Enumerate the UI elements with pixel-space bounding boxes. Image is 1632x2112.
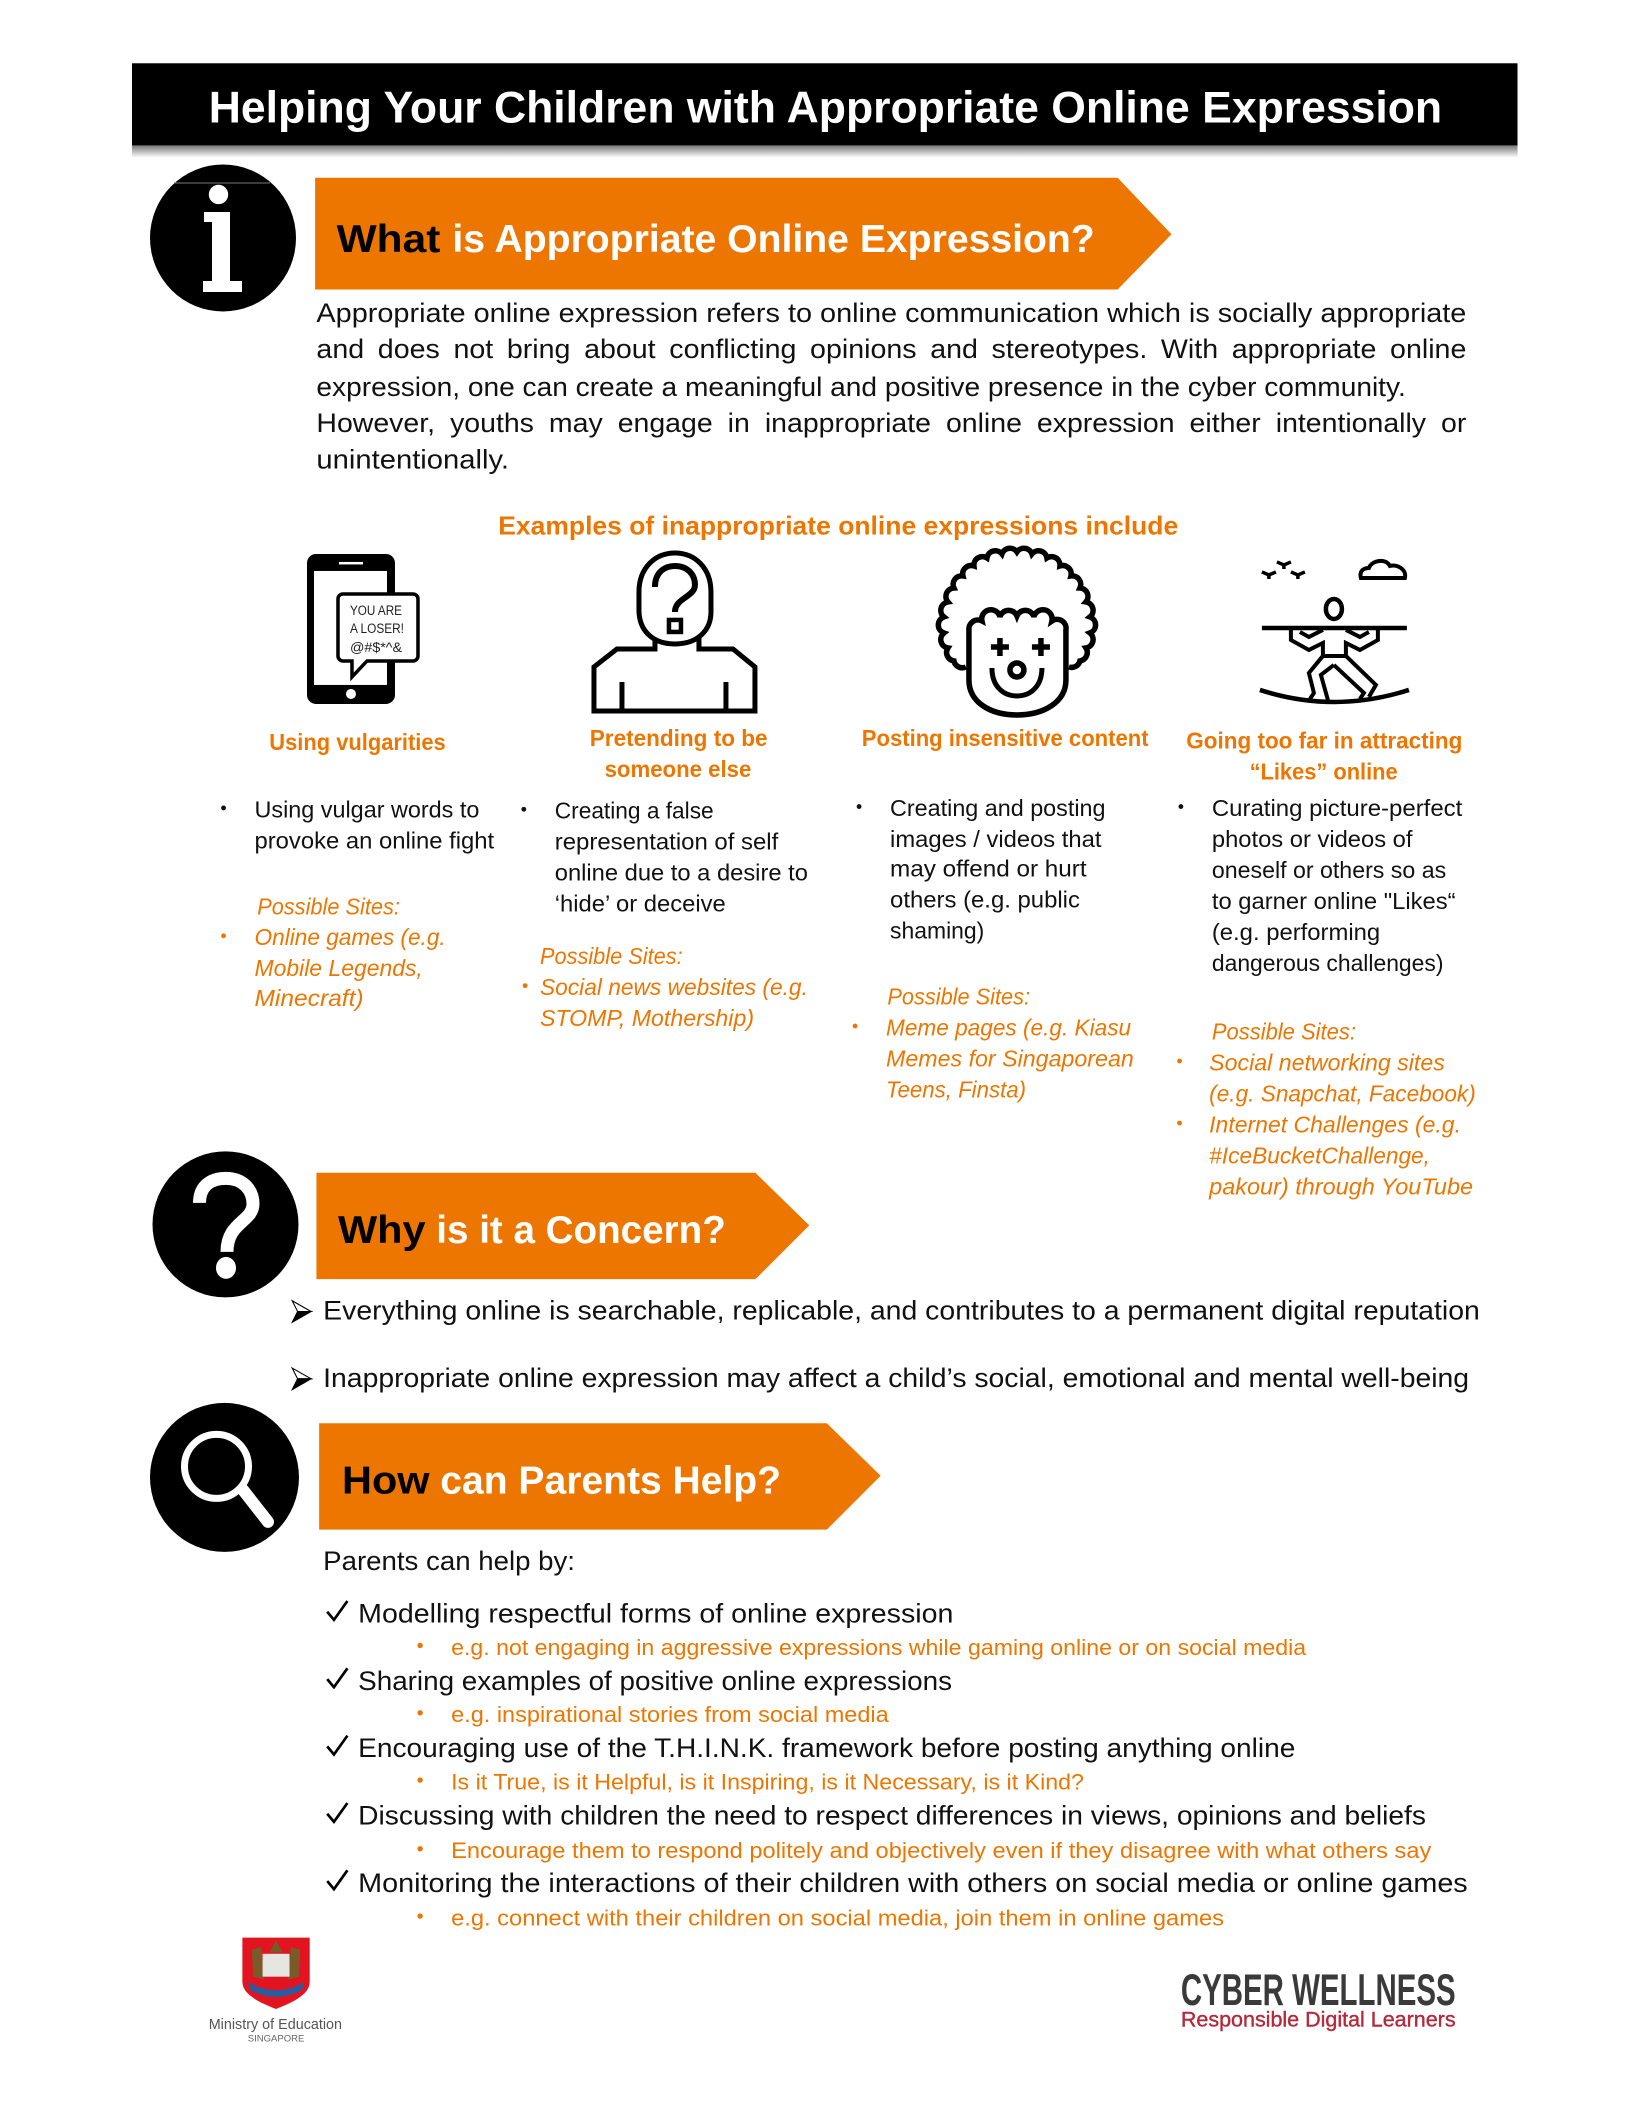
description: dangerous challenges) — [1212, 950, 1443, 976]
label: pretending: Pretending to be — [590, 725, 768, 751]
description: provoke an online fight — [255, 827, 495, 853]
paragraph: definition: expression, one can create a meaningful and positive presence in the cyber community. — [316, 372, 1406, 402]
icon: person with question mark — [594, 553, 755, 711]
description: others (e.g. public — [890, 887, 1080, 913]
heading arrow: why: Why — [338, 1209, 426, 1252]
label: going too far: “Likes” online — [1250, 759, 1398, 785]
possible sites — [1177, 1019, 1476, 1199]
tip 2 — [327, 1666, 952, 1727]
heading arrow: why: is it a Concern? — [436, 1209, 726, 1252]
tip 4 — [327, 1801, 1432, 1863]
tip 3: Encouraging use of the T.H.I.N.K. framework before posting anything online — [358, 1733, 1295, 1763]
description — [221, 796, 495, 853]
title banner: Helping Your Children with Appropriate Online Expression — [209, 84, 1442, 133]
paragraph: definition — [316, 298, 1466, 475]
panel: pretending to be someone else — [521, 553, 808, 1031]
label: pretending: someone else — [605, 756, 751, 782]
possible sites: Possible Sites: — [1212, 1019, 1356, 1045]
logo: cyber wellness: CYBER WELLNESS — [1181, 1966, 1456, 2015]
heading arrow: why — [316, 1173, 809, 1279]
description: oneself or others so as — [1212, 857, 1446, 883]
possible sites: Internet Challenges (e.g. — [1209, 1111, 1461, 1137]
description: online due to a desire to — [555, 860, 808, 886]
tip 1: e.g. not engaging in aggressive expressions while gaming online or on social media — [451, 1635, 1307, 1660]
description: shaming) — [890, 918, 984, 944]
panel: how can parents help — [150, 1403, 1468, 1931]
logo: cyber wellness — [1181, 1966, 1456, 2031]
possible sites: Possible Sites: — [257, 893, 400, 919]
possible sites: Teens, Finsta) — [886, 1076, 1026, 1102]
description: Using vulgar words to — [255, 796, 479, 822]
heading arrow: how: How — [342, 1459, 430, 1502]
possible sites: Memes for Singaporean — [886, 1045, 1134, 1071]
paragraph: definition: and does not bring about conflicting opinions and stereotypes. With appropriate online — [316, 334, 1466, 364]
description: Creating a false — [555, 798, 714, 824]
possible sites: Online games (e.g. — [255, 924, 446, 950]
tip 1 — [327, 1599, 1307, 1660]
tip list — [327, 1599, 1468, 1931]
logo: cyber wellness: Responsible Digital Learners — [1181, 2007, 1456, 2031]
possible sites: #IceBucketChallenge, — [1209, 1142, 1430, 1168]
panel: using vulgarities — [221, 554, 495, 1011]
tip 1: Modelling respectful forms of online expression — [358, 1599, 953, 1629]
concern point: well-being: Inappropriate online expression may affect a child’s social, emotional and mental well-being — [323, 1363, 1469, 1393]
tip 2: Sharing examples of positive online expressions — [358, 1666, 952, 1696]
icon: phone with speech bubble: @#$*^& — [350, 640, 402, 655]
icon: magnifying glass circle — [150, 1403, 299, 1552]
tip 2: e.g. inspirational stories from social media — [451, 1702, 889, 1727]
possible sites: pakour) through YouTube — [1208, 1173, 1473, 1199]
icon: question mark circle — [153, 1151, 298, 1297]
icon: clown face — [938, 548, 1096, 715]
possible sites: Possible Sites: — [540, 943, 683, 969]
tip 5: Monitoring the interactions of their children with others on social media or online games — [358, 1868, 1468, 1898]
title banner — [132, 63, 1518, 158]
possible sites: Meme pages (e.g. Kiasu — [886, 1014, 1131, 1040]
subheading: examples: Examples of inappropriate online expressions include — [498, 511, 1178, 541]
description: may offend or hurt — [890, 856, 1087, 882]
paragraph: definition: However, youths may engage in inappropriate online expression either intentionally or — [316, 408, 1466, 438]
possible sites — [221, 893, 446, 1011]
description — [857, 795, 1105, 944]
description — [521, 798, 808, 917]
label: posting insensitive content: Posting insensitive content — [862, 725, 1149, 751]
label: using vulgarities: Using vulgarities — [269, 729, 446, 755]
description — [1178, 795, 1463, 976]
paragraph: definition: Appropriate online expression refers to online communication which is socially appropriate — [316, 298, 1466, 328]
logo: ministry of education: SINGAPORE — [248, 2032, 304, 2043]
heading arrow: how — [319, 1423, 881, 1530]
description: to garner online "Likes“ — [1212, 888, 1456, 914]
icon: tightrope walker — [1260, 561, 1409, 702]
heading arrow: how: can Parents Help? — [440, 1459, 781, 1502]
description: images / videos that — [890, 826, 1102, 852]
tip 5 — [327, 1868, 1468, 1931]
label: going too far — [1186, 728, 1462, 785]
icon: phone with speech bubble: A LOSER! — [350, 621, 404, 636]
possible sites — [523, 943, 808, 1031]
tip 4: Discussing with children the need to respect differences in views, opinions and beliefs — [358, 1801, 1426, 1831]
panel: posting insensitive content — [853, 548, 1149, 1102]
description: Curating picture-perfect — [1212, 795, 1463, 821]
panel: why is it a concern — [153, 1151, 1480, 1393]
paragraph: definition: unintentionally. — [316, 445, 509, 475]
possible sites: Social networking sites — [1209, 1049, 1445, 1075]
panel: what is appropriate online expression — [150, 164, 1476, 1199]
possible sites: Mobile Legends, — [255, 955, 423, 981]
icon: information circle — [150, 164, 296, 311]
tip 3: Is it True, is it Helpful, is it Inspiring, is it Necessary, is it Kind? — [451, 1770, 1084, 1795]
tip 5: e.g. connect with their children on social media, join them in online games — [451, 1906, 1224, 1931]
concern point: permanent reputation: Everything online is searchable, replicable, and contributes to a permanent digital reputation — [323, 1296, 1480, 1326]
description: ‘hide’ or deceive — [555, 891, 726, 917]
heading arrow: what — [315, 178, 1171, 289]
tip 4: Encourage them to respond politely and objectively even if they disagree with what others say — [451, 1838, 1432, 1863]
panel: going too far for likes — [1177, 561, 1476, 1199]
logo: ministry of education — [209, 1938, 342, 2043]
icon: phone with speech bubble — [307, 554, 418, 704]
possible sites: Social news websites (e.g. — [540, 974, 808, 1000]
possible sites: STOMP, Mothership) — [540, 1005, 754, 1031]
possible sites: Minecraft) — [255, 985, 364, 1011]
description: photos or videos of — [1212, 826, 1413, 852]
icon: phone with speech bubble: YOU ARE — [350, 603, 402, 618]
heading arrow: what: is Appropriate Online Expression? — [452, 218, 1095, 261]
possible sites: Possible Sites: — [887, 983, 1030, 1009]
possible sites: (e.g. Snapchat, Facebook) — [1209, 1080, 1476, 1106]
description: (e.g. performing — [1212, 919, 1380, 945]
heading arrow: what: What — [337, 218, 440, 261]
tip 3 — [327, 1733, 1295, 1795]
label: going too far: Going too far in attracting — [1186, 728, 1462, 754]
description: Creating and posting — [890, 795, 1105, 821]
intro text: Parents can help by: — [323, 1546, 575, 1576]
possible sites — [853, 983, 1134, 1102]
logo: ministry of education: Ministry of Education — [209, 2017, 342, 2033]
label: pretending — [590, 725, 768, 782]
description: representation of self — [555, 829, 779, 855]
